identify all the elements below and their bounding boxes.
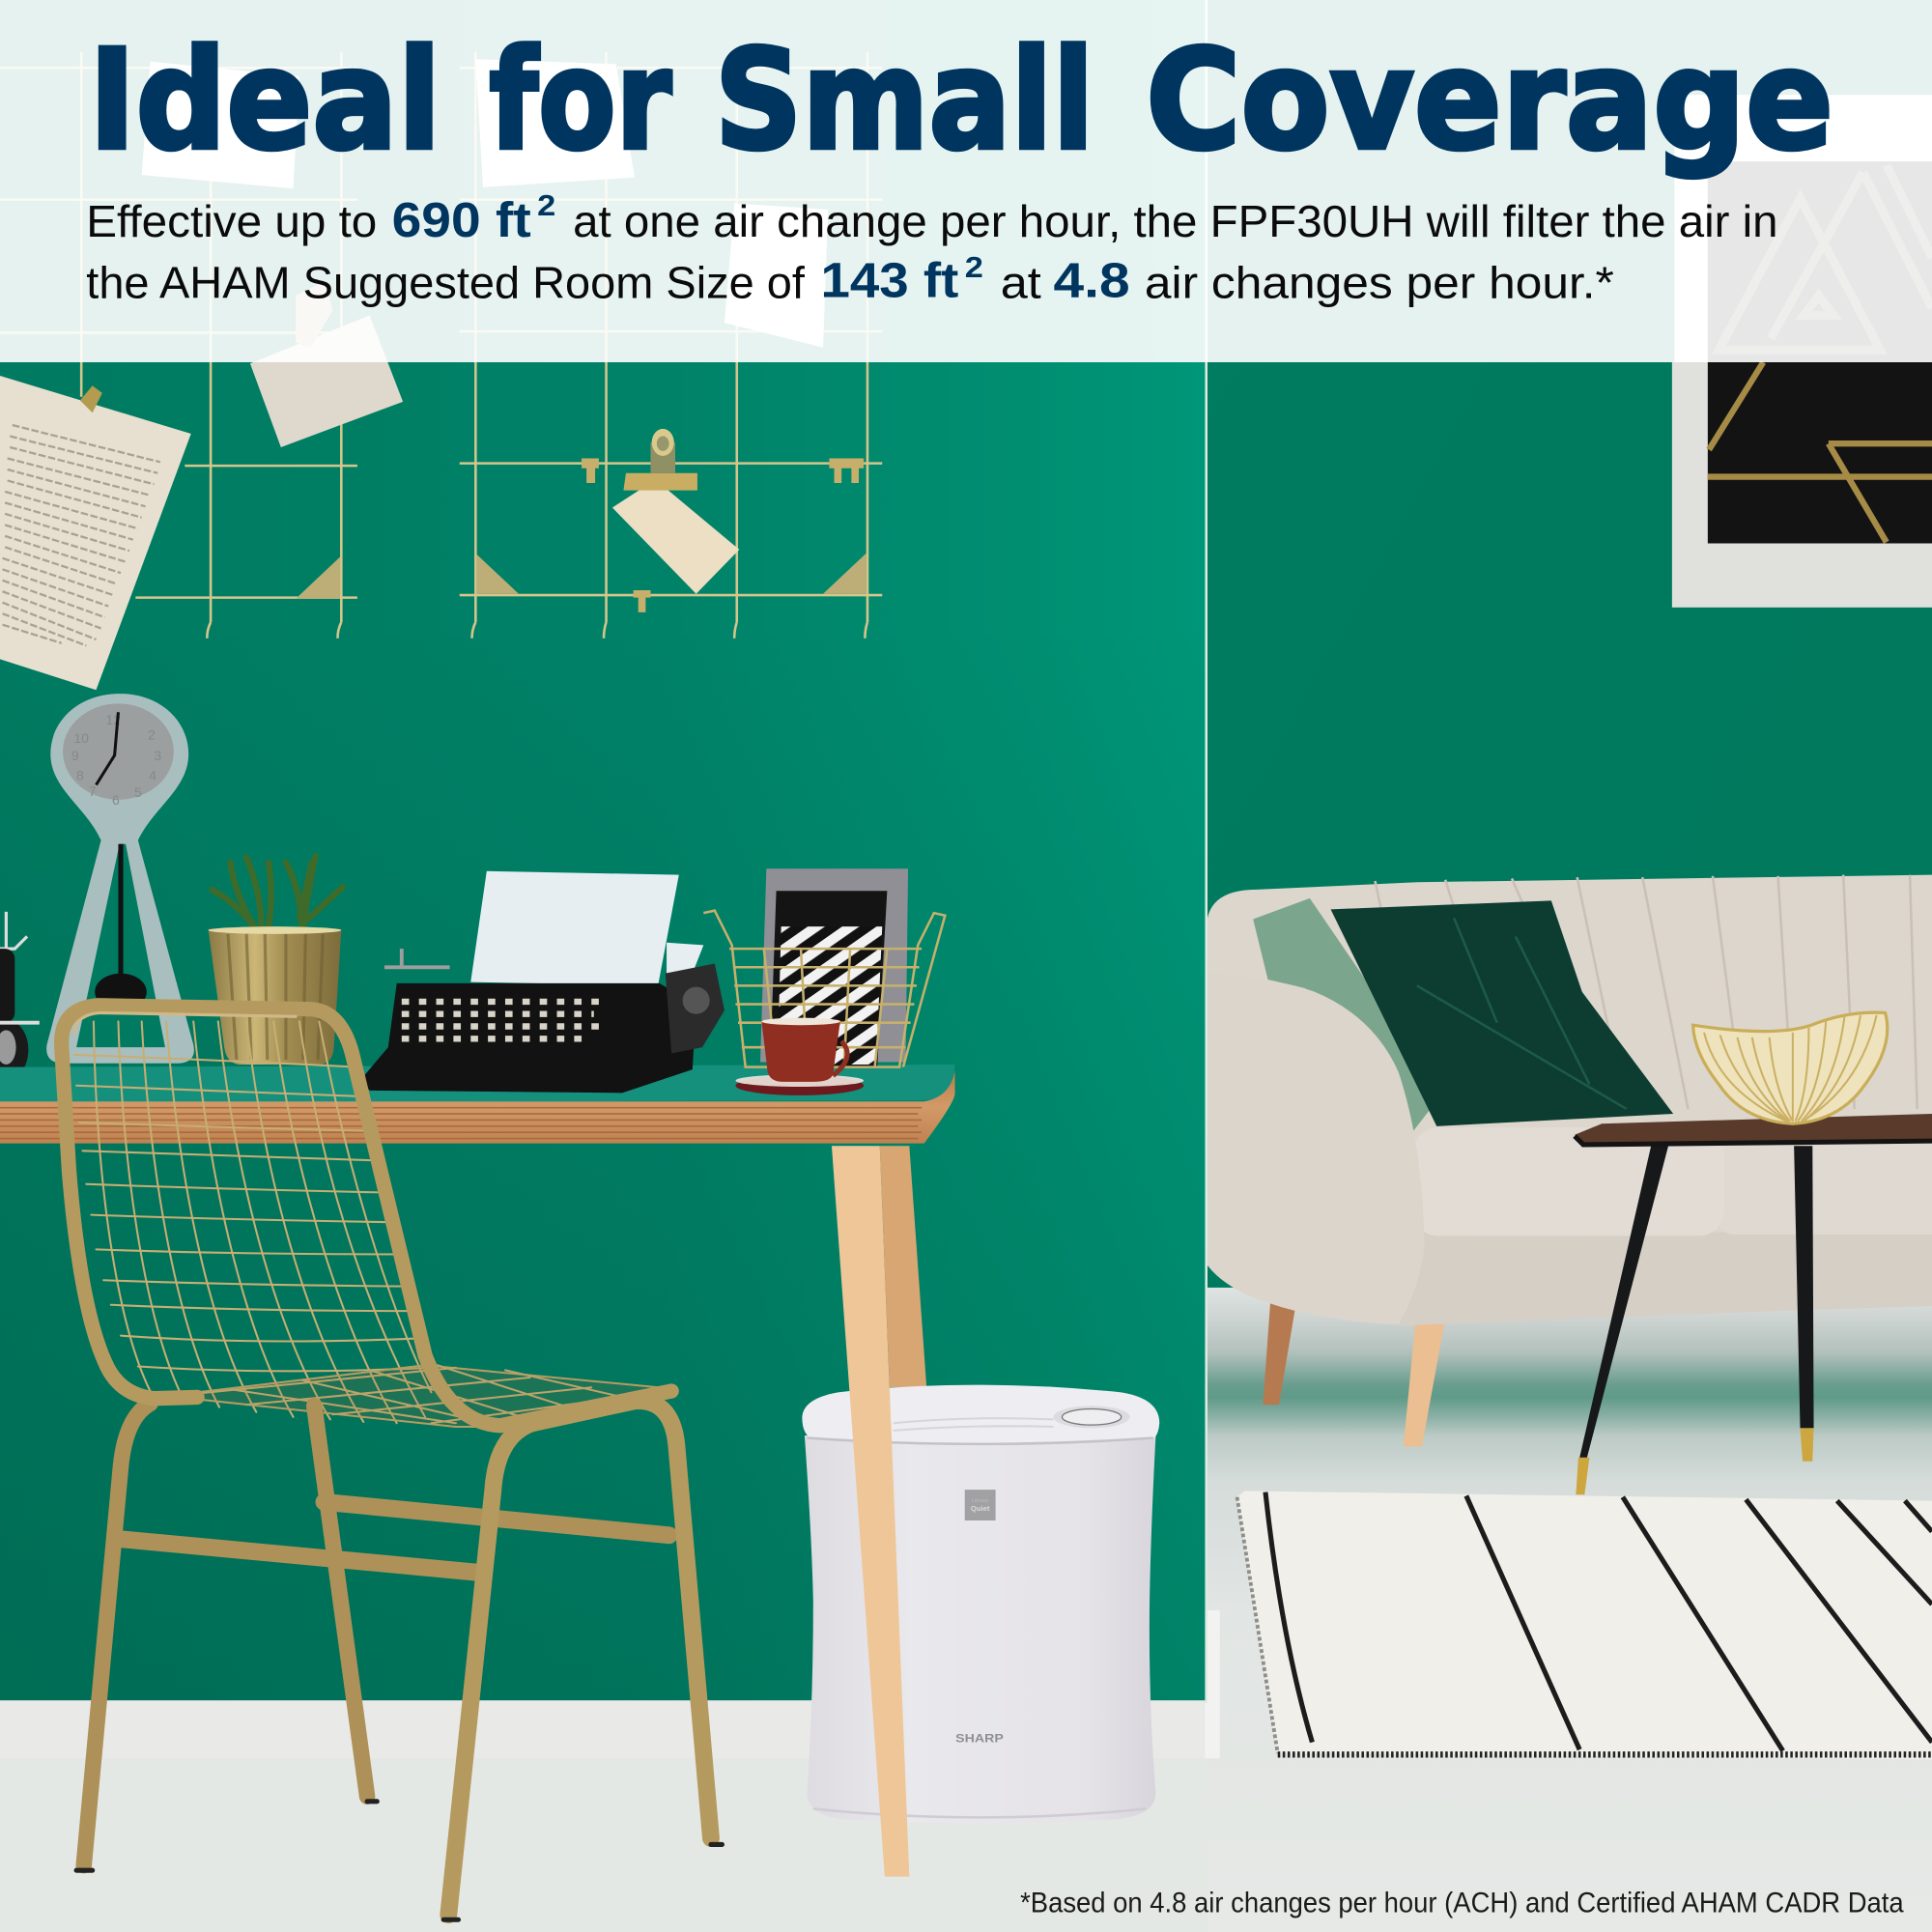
description text: 4.8: [1054, 252, 1130, 307]
background: right floor: [1208, 1288, 1932, 1932]
title: Small: [715, 19, 1094, 181]
table top: [0, 1065, 955, 1103]
coffee table legs: [1579, 1146, 1668, 1458]
sofa seat cushions: [1719, 1140, 1932, 1235]
table back leg: [880, 1146, 926, 1387]
SHARP logo: SHARP: [955, 1732, 1004, 1746]
sofa: [1208, 875, 1932, 1446]
framed art: [1672, 95, 1932, 608]
chair front legs: [448, 1401, 711, 1915]
brass pot: [209, 926, 341, 1065]
description text: Effective up to: [86, 196, 377, 246]
wire basket: [703, 911, 945, 1067]
wall corner edge: [1205, 0, 1208, 1703]
description text: 143 ft: [820, 252, 958, 307]
translucent header panel: [0, 0, 1932, 362]
gold wire bowl: [1693, 1012, 1888, 1123]
description text: at one air change per hour, the FPF30UH will filter the air in: [573, 196, 1778, 246]
background: left green wall: [0, 0, 1208, 1703]
chair frame: [62, 1006, 671, 1426]
clock: 5: [134, 784, 142, 800]
sofa arm: [1208, 972, 1424, 1324]
clock: 4: [149, 767, 156, 782]
title: Ideal: [89, 19, 441, 181]
sofa base: [1399, 1233, 1932, 1325]
description text: at: [1001, 258, 1041, 308]
description text: 2: [965, 251, 983, 284]
description text: 2: [537, 189, 555, 222]
title: [89, 19, 1833, 181]
plant: [212, 856, 343, 930]
purifier body: [805, 1435, 1155, 1823]
description text: [86, 189, 1778, 308]
light green pillow: [1253, 898, 1443, 1131]
saucer: [735, 1074, 864, 1095]
coffee table: [1575, 1114, 1932, 1494]
bulldog clip and note: [582, 429, 864, 612]
chair mesh back: [74, 1021, 434, 1423]
books in basket: [760, 868, 908, 1067]
handwritten letter: [0, 376, 191, 690]
dark green pillow: [1331, 900, 1673, 1126]
title: for: [489, 19, 672, 181]
rug: [1237, 1491, 1932, 1759]
toy motorcycle: [0, 912, 40, 1079]
Library Quiet badge: Library: [972, 1498, 989, 1504]
table front leg: [832, 1146, 909, 1877]
clock: 2: [148, 726, 156, 742]
skirting at wall corner: [1205, 1610, 1220, 1758]
clock: 6: [112, 792, 120, 808]
gold wire chair: [62, 1006, 722, 1919]
background: left floor: [0, 1756, 1208, 1932]
wire wall rack right: [460, 52, 882, 639]
typewriter paper: [470, 871, 703, 985]
clock: [46, 694, 194, 1064]
clock: 8: [76, 767, 84, 782]
clock: 3: [154, 748, 161, 763]
air purifier: [802, 1385, 1159, 1823]
chair legs and cross bars: [84, 1404, 669, 1865]
typewriter: [361, 949, 724, 1093]
wall lower shading: [0, 616, 1208, 1703]
clock: 9: [71, 748, 79, 763]
skirting board: [0, 1700, 1205, 1758]
description text: air changes per hour.*: [1145, 258, 1614, 308]
control dial: [1054, 1406, 1130, 1428]
pinned photo papers behind panel: [142, 59, 828, 348]
sofa legs: [1263, 1302, 1296, 1405]
clock: 10: [73, 730, 89, 746]
purifier lid: [802, 1385, 1159, 1445]
table wood edge: [0, 1069, 955, 1144]
title: Coverage: [1146, 19, 1833, 181]
clipped paper note: [250, 281, 403, 447]
chair seat mesh: [166, 1365, 671, 1427]
coffee table top: [1575, 1114, 1932, 1145]
background: right green wall: [1208, 0, 1932, 1306]
Library Quiet badge: [965, 1490, 996, 1520]
clock: 7: [89, 783, 97, 799]
red cup: [761, 1018, 847, 1082]
description text: 690 ft: [392, 192, 531, 247]
sofa back: [1208, 875, 1932, 1233]
Library Quiet badge: Quiet: [971, 1504, 990, 1513]
clock: 12: [106, 712, 121, 727]
rack corner triangles: [296, 554, 867, 599]
wire wall rack left: [0, 52, 357, 639]
description text: the AHAM Suggested Room Size of: [86, 258, 805, 308]
